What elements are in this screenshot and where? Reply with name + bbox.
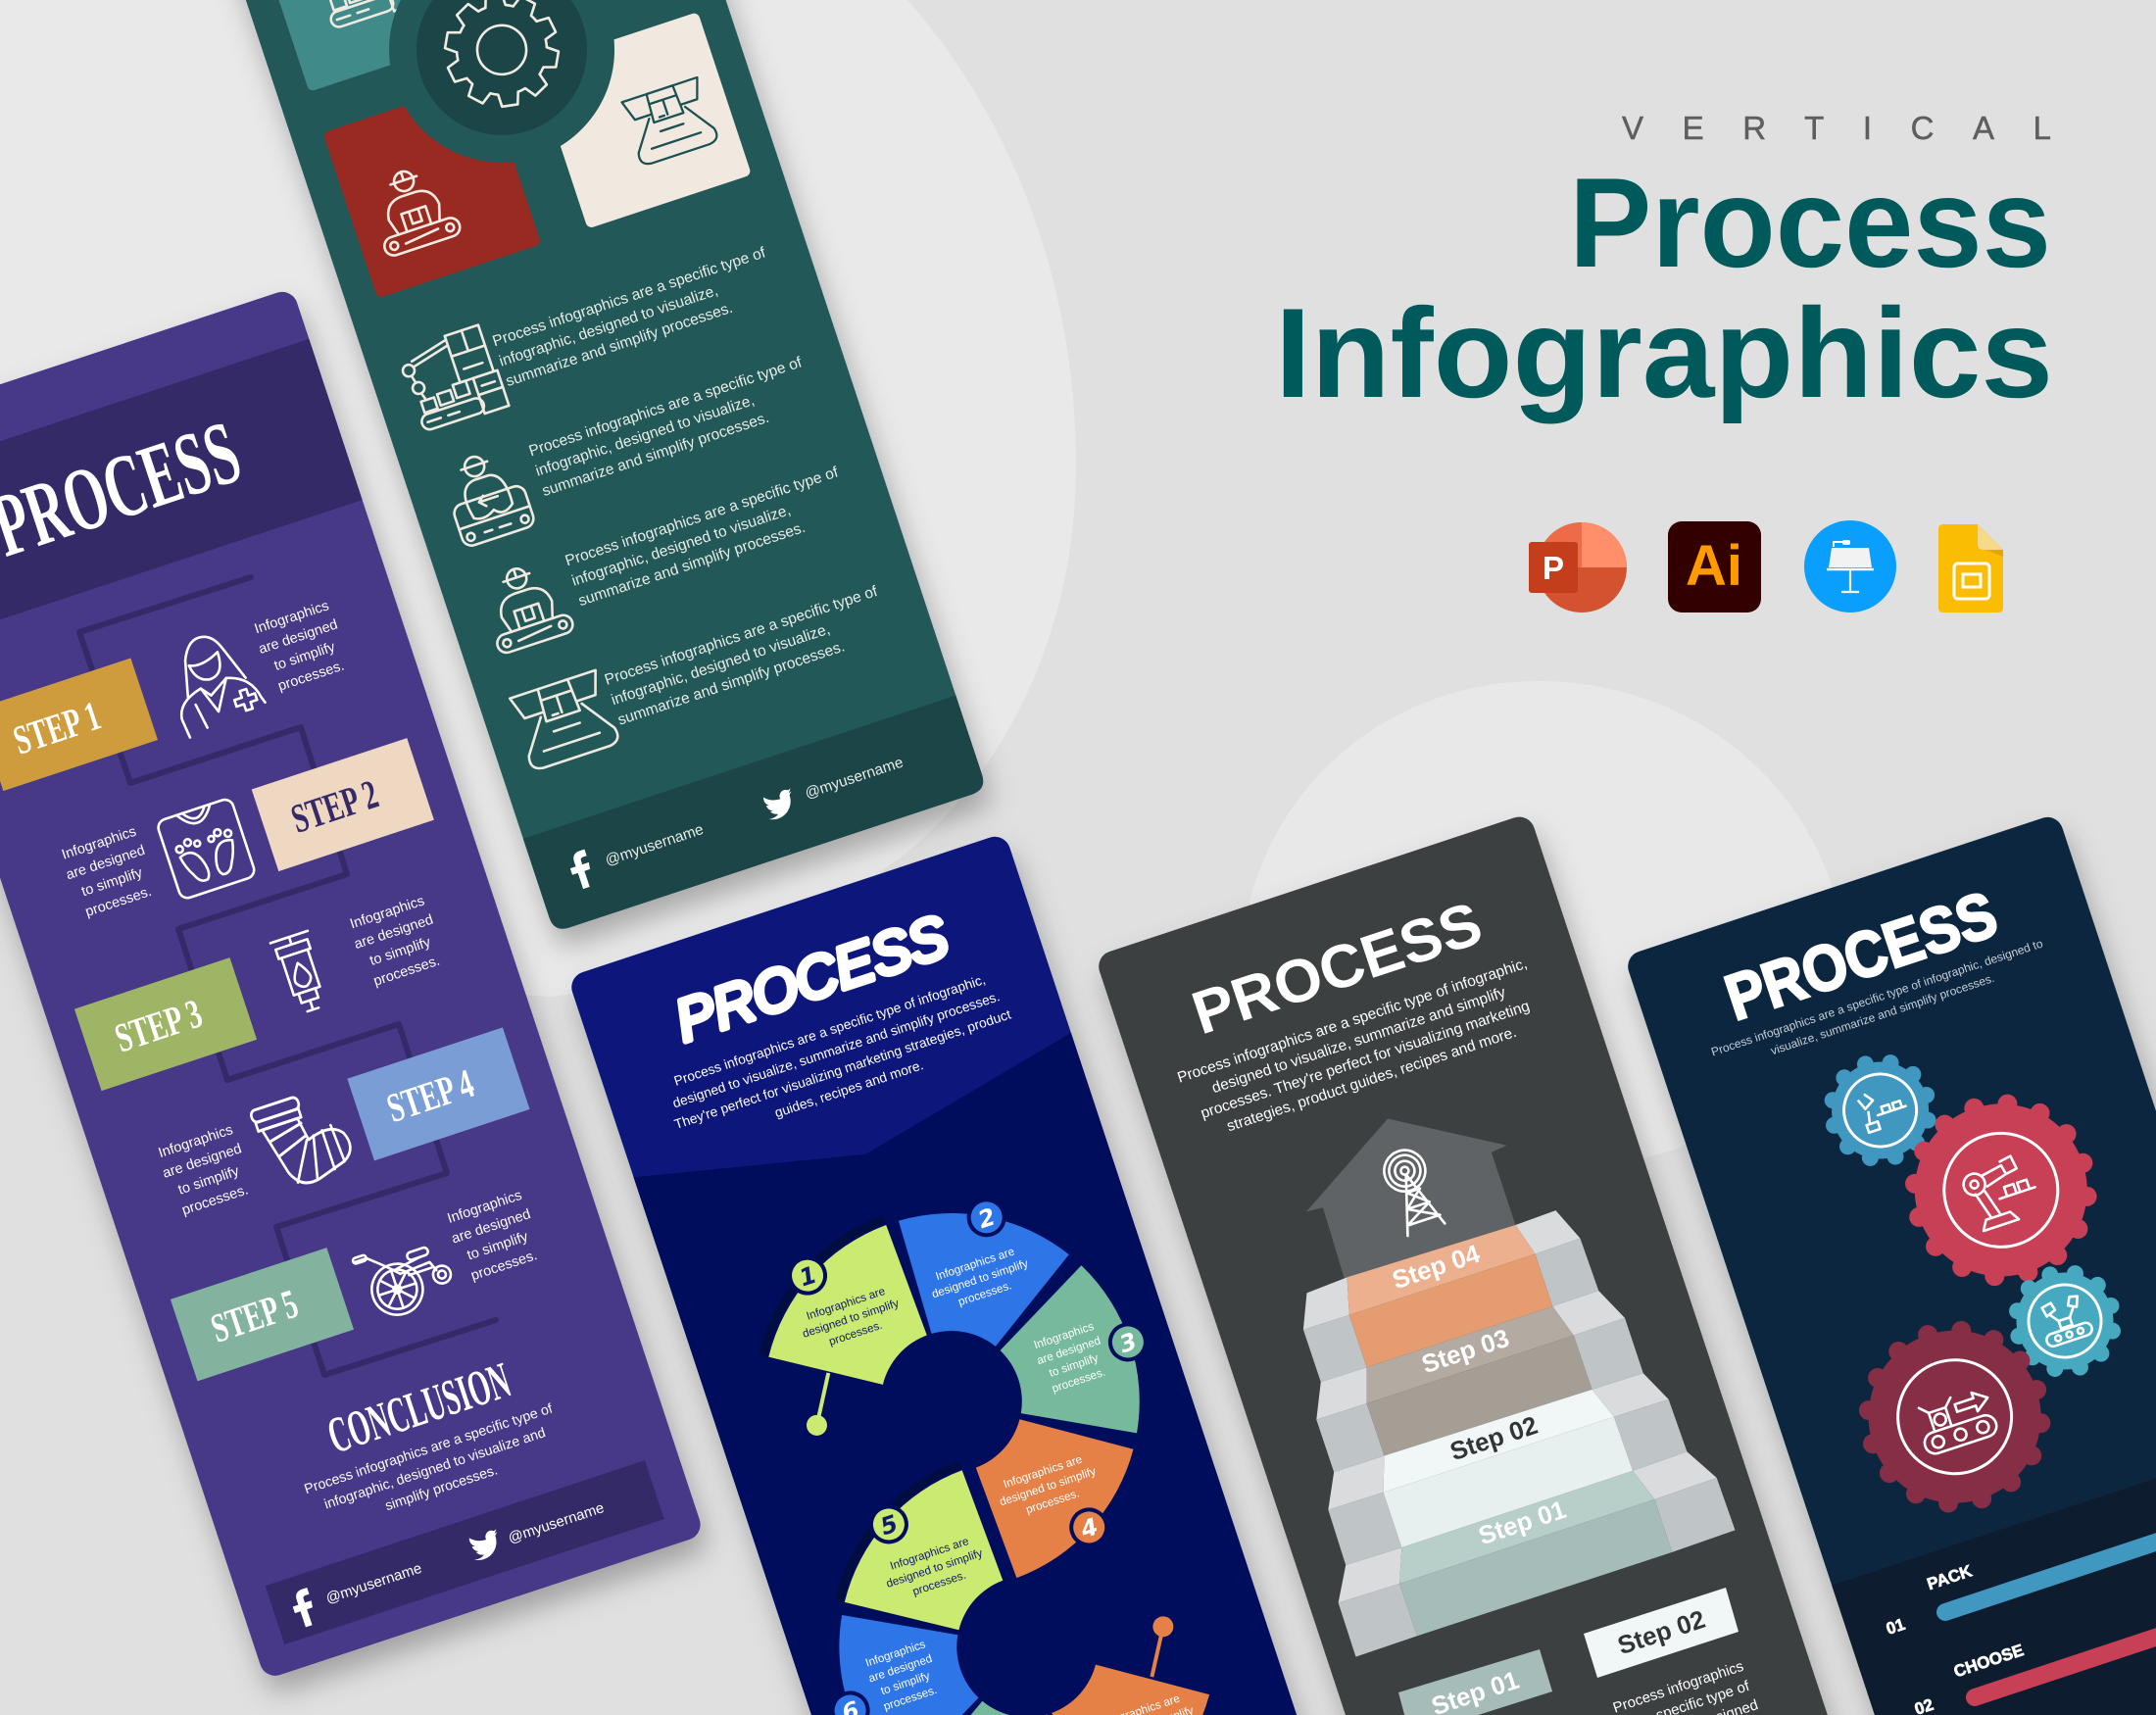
segment 4 text: Infographics are <box>1002 1453 1084 1491</box>
facebook handle: @myusername <box>323 1560 424 1607</box>
blue intro text: designed to visualize, summarize and simplify processes. <box>670 989 1002 1110</box>
label 01: 01 <box>1884 1615 1907 1639</box>
icon: leg cast <box>250 1085 358 1194</box>
step 3 text: Infographics <box>348 893 426 932</box>
step 5 text: are designed <box>450 1206 533 1248</box>
purple title band <box>0 339 363 645</box>
blue intro text: Process infographics are a specific type of infographic, <box>672 972 987 1089</box>
grey card background <box>1095 812 1939 1715</box>
segment 1 text: designed to simplify <box>801 1297 901 1341</box>
segment 1 stick <box>793 1373 846 1439</box>
step 02 box <box>1584 1588 1739 1678</box>
arrow <box>1306 1118 1515 1280</box>
conclusion heading: CONCLUSION <box>321 1352 517 1464</box>
step 5 label: STEP 5 <box>206 1282 304 1352</box>
icon: powerpoint: P <box>1543 550 1564 586</box>
step 03 label: Step 03 <box>1418 1323 1513 1379</box>
connector line <box>79 577 496 1375</box>
heading: process: Process <box>1569 151 2051 294</box>
segment 5 <box>816 1469 1013 1661</box>
conclusion text: simplify processes. <box>383 1462 500 1514</box>
segment 2 text: designed to simplify <box>930 1257 1030 1300</box>
step 2 text: are designed <box>64 843 147 883</box>
icon: worker on red tile <box>364 160 463 258</box>
facebook handle: @myusername <box>603 821 706 869</box>
row 4 text: Process infographics are a specific type of <box>603 583 880 689</box>
segment 3 text: to simplify <box>1048 1351 1100 1380</box>
segment 6 text: to simplify <box>879 1669 932 1697</box>
segment 4 <box>965 1389 1160 1579</box>
step 2 text: to simplify <box>79 865 145 900</box>
icon: google slides <box>1938 524 2003 612</box>
badge 1 <box>785 1253 830 1298</box>
segment shadows <box>729 1219 993 1600</box>
step 02 label: Step 02 <box>1446 1410 1542 1466</box>
label choose: CHOOSE <box>1951 1641 2026 1681</box>
badge 3 <box>1105 1320 1151 1364</box>
navy title: PROCESS <box>1717 877 2005 1034</box>
segment 3 text: Infographics <box>1032 1320 1096 1351</box>
segment 2 <box>895 1173 1089 1364</box>
step 4 text: are designed <box>161 1141 244 1182</box>
step 02 text: Process infographics <box>1611 1658 1745 1715</box>
teal card background <box>144 0 987 933</box>
step 1 text: processes. <box>276 658 346 695</box>
step 3 text: to simplify <box>368 934 433 969</box>
row 1 icon <box>396 323 509 434</box>
icon: powerpoint <box>1529 522 1627 612</box>
panel: grey process infographic <box>1095 812 1939 1715</box>
segment 4 text: processes. <box>1024 1487 1081 1516</box>
step 01 label: Step 01 <box>1475 1494 1570 1550</box>
row 4 text: summarize and simplify processes. <box>615 638 847 729</box>
step 5 text: processes. <box>469 1248 539 1284</box>
panel: purple process infographic <box>0 288 705 1680</box>
teal square tile <box>255 0 473 92</box>
step 02 box label: Step 02 <box>1614 1604 1709 1660</box>
navy footer <box>1832 1442 2156 1715</box>
segment 8 stick <box>1135 1614 1187 1677</box>
twitter handle: @myusername <box>506 1499 607 1546</box>
segment 3 <box>983 1258 1157 1466</box>
background circle top left <box>0 0 1076 997</box>
heading: infographics: Infographics <box>1275 281 2053 424</box>
step 04 label: Step 04 <box>1389 1239 1484 1295</box>
icon: twitter <box>467 1529 504 1562</box>
segment 2 text: Infographics are <box>934 1246 1016 1283</box>
blue intro text: They're perfect for visualizing marketing strategies, product <box>672 1006 1013 1132</box>
segment 6 text: processes. <box>882 1684 939 1713</box>
step 4 box <box>347 1027 530 1160</box>
segment 1 <box>741 1224 937 1416</box>
blue title: PROCESS <box>667 904 956 1054</box>
icon: facebook <box>565 850 596 891</box>
segment 6 text: are designed <box>867 1652 934 1685</box>
step 3 text: processes. <box>371 954 442 990</box>
step 4 text: processes. <box>180 1182 250 1219</box>
twitter handle: @myusername <box>803 755 906 803</box>
segment 1 text: Infographics are <box>805 1285 887 1323</box>
step 01 box <box>1398 1649 1552 1715</box>
segment 1 text: processes. <box>827 1319 884 1348</box>
navy intro text: visualize, summarize and simplify processes. <box>1769 971 1996 1057</box>
grey title: PROCESS <box>1184 890 1491 1048</box>
row 2 text: Process infographics are a specific type of <box>527 354 805 460</box>
segment 8 <box>1042 1634 1236 1715</box>
step 1 text: are designed <box>257 616 340 658</box>
step 1 text: to simplify <box>272 639 338 674</box>
step 5 box <box>171 1248 354 1381</box>
row 4 icon <box>509 670 620 771</box>
segment 6 <box>821 1583 996 1715</box>
icon: package conveyor on cream tile <box>621 77 719 167</box>
gear: blue <box>1819 1049 1941 1172</box>
badge 5 <box>866 1502 911 1546</box>
teal footer <box>523 696 987 933</box>
staircase with arrow <box>1303 1118 1735 1657</box>
gear: teal <box>2003 1259 2127 1383</box>
icon: illustrator <box>1668 521 1761 612</box>
segment 4 text: designed to simplify <box>998 1465 1098 1508</box>
grey intro text: strategies, product guides, recipes and more. <box>1225 1024 1519 1135</box>
step 2 text: processes. <box>83 884 154 920</box>
eyebrow: vertical: VERTICAL <box>1622 110 2051 146</box>
badge 2: 2 <box>975 1202 999 1234</box>
cream tile <box>534 12 752 229</box>
gear: maroon <box>1845 1308 2064 1526</box>
segment 5 text: designed to simplify <box>885 1546 984 1591</box>
badge 5: 5 <box>877 1509 902 1541</box>
badge 4: 4 <box>1076 1512 1102 1544</box>
row 3 text: Process infographics are a specific type of <box>564 464 841 569</box>
ring cut-out <box>360 0 644 192</box>
label pack: PACK <box>1925 1561 1975 1593</box>
segment 6 text: Infographics <box>863 1638 927 1670</box>
grey title and intro <box>1151 879 1548 1145</box>
row 1 text: infographic, designed to visualize, <box>497 282 720 370</box>
progress bar 01 <box>1945 1526 2156 1612</box>
row 2 text: infographic, designed to visualize, <box>533 392 757 480</box>
navy card background <box>1624 813 2156 1715</box>
progress bar 02 <box>1975 1621 2156 1697</box>
purple card background <box>0 288 705 1680</box>
badge 3: 3 <box>1116 1327 1141 1358</box>
segment 5 text: processes. <box>911 1569 967 1598</box>
row 2 icon <box>439 445 536 548</box>
step 2 box <box>252 738 434 871</box>
segment 3 text: processes. <box>1051 1366 1107 1396</box>
step 5 text: to simplify <box>466 1229 531 1263</box>
step 4 text: Infographics <box>157 1122 235 1161</box>
step 1 text: Infographics <box>253 598 331 637</box>
step 3 text: are designed <box>353 912 435 953</box>
row 2 text: summarize and simplify processes. <box>540 410 771 500</box>
badge 1: 1 <box>796 1261 820 1292</box>
segment 5 text: Infographics are <box>889 1535 970 1573</box>
row 1 text: Process infographics are a specific type of <box>491 244 768 350</box>
purple footer band <box>266 1460 664 1644</box>
step 4 text: to simplify <box>176 1163 242 1199</box>
icon: keynote <box>1804 520 1896 612</box>
red tile <box>322 78 541 298</box>
step 1 box <box>0 658 158 791</box>
row 3 text: infographic, designed to visualize, <box>569 502 793 590</box>
panel: navy process infographic <box>1624 813 2156 1715</box>
row 3 icon <box>476 557 575 655</box>
icon: signal tower <box>1379 1145 1445 1237</box>
row 4 text: infographic, designed to visualize, <box>610 621 832 709</box>
icon: wheelchair <box>352 1231 459 1324</box>
gear: red <box>1892 1081 2110 1299</box>
badge 2 <box>964 1196 1008 1240</box>
icon: doctor <box>159 624 269 738</box>
icon: gear <box>435 0 568 114</box>
step 3 label: STEP 3 <box>110 992 208 1061</box>
background circle lower right <box>1250 681 1833 1274</box>
blue card dark body <box>634 1033 1416 1715</box>
grey intro text: designed to visualize, summarize and simplify <box>1210 984 1508 1097</box>
segment 2 text: processes. <box>956 1279 1013 1308</box>
row 1 text: summarize and simplify processes. <box>504 300 735 390</box>
icon: twitter <box>761 788 798 821</box>
segment 3 text: are designed <box>1035 1335 1102 1367</box>
panel: teal process infographic <box>144 0 987 933</box>
badge 6 <box>828 1689 872 1715</box>
icon on teal tile <box>306 0 418 31</box>
grey intro text: Process infographics are a specific type of infographic, <box>1175 956 1530 1087</box>
navy intro text: Process infographics are a specific type of infographic, designed to <box>1709 936 2045 1058</box>
segment 7 <box>888 1683 1084 1715</box>
step 2 text: Infographics <box>60 824 138 863</box>
icon: facebook <box>288 1588 318 1629</box>
step 3 box <box>74 957 257 1091</box>
icon: illustrator: Ai <box>1686 534 1742 598</box>
step 1 label: STEP 1 <box>8 694 106 764</box>
grey intro text: processes. They're perfect for visualizing marketing <box>1199 998 1532 1122</box>
step 5 text: Infographics <box>446 1188 524 1227</box>
conclusion text: infographic, designed to visualize and <box>322 1425 548 1513</box>
row 3 text: summarize and simplify processes. <box>576 519 808 610</box>
step 2 label: STEP 2 <box>286 772 384 843</box>
panel: blue process infographic <box>567 833 1416 1715</box>
badge 4 <box>1066 1505 1111 1549</box>
icon: iv bag <box>270 931 331 1015</box>
blue card background <box>567 833 1416 1715</box>
conclusion text: Process infographics are a specific type of <box>303 1401 555 1497</box>
gear badge <box>394 0 610 158</box>
step 4 label: STEP 4 <box>381 1061 479 1132</box>
blue intro text: guides, recipes and more. <box>773 1057 925 1120</box>
icon: scale <box>156 798 257 901</box>
